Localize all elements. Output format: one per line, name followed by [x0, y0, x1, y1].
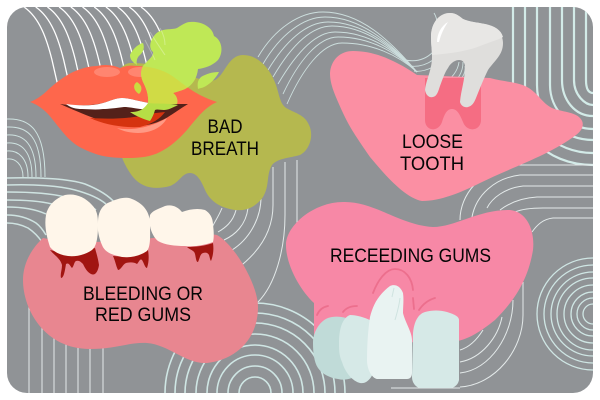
- heading: bad breath: [191, 117, 259, 160]
- panel: loose tooth: [330, 13, 583, 201]
- panel: receding gums: [286, 202, 533, 388]
- heading: bleeding gums: [83, 284, 203, 326]
- heading: receding gums: RECEEDING GUMS: [330, 246, 491, 267]
- heading: loose tooth: TOOTH: [400, 154, 464, 175]
- concentric circles: [537, 258, 593, 370]
- icon: receded gum lines: [317, 269, 435, 315]
- blob: bleeding gums: [23, 234, 258, 363]
- icon: teeth: [313, 285, 459, 388]
- heading: bleeding gums: BLEEDING OR: [83, 284, 203, 305]
- icon: tooth: [425, 13, 503, 107]
- heading: bleeding gums: RED GUMS: [95, 305, 191, 326]
- blob: receding gums: [286, 202, 533, 345]
- icon: teeth: [45, 194, 214, 257]
- blob: loose tooth: [330, 51, 583, 201]
- gum socket: [425, 78, 481, 129]
- panel: bad breath: [30, 22, 311, 210]
- heading: loose tooth: [400, 132, 464, 175]
- blob: bad breath: [110, 55, 311, 210]
- blood: [50, 243, 213, 278]
- panel: bleeding gums: [23, 194, 258, 363]
- icon: lips: [30, 65, 217, 158]
- icon: green breath cloud: [130, 22, 221, 121]
- heading: bad breath: BAD: [208, 117, 242, 138]
- heading: loose tooth: LOOSE: [402, 132, 463, 153]
- heading: bad breath: BREATH: [191, 139, 259, 160]
